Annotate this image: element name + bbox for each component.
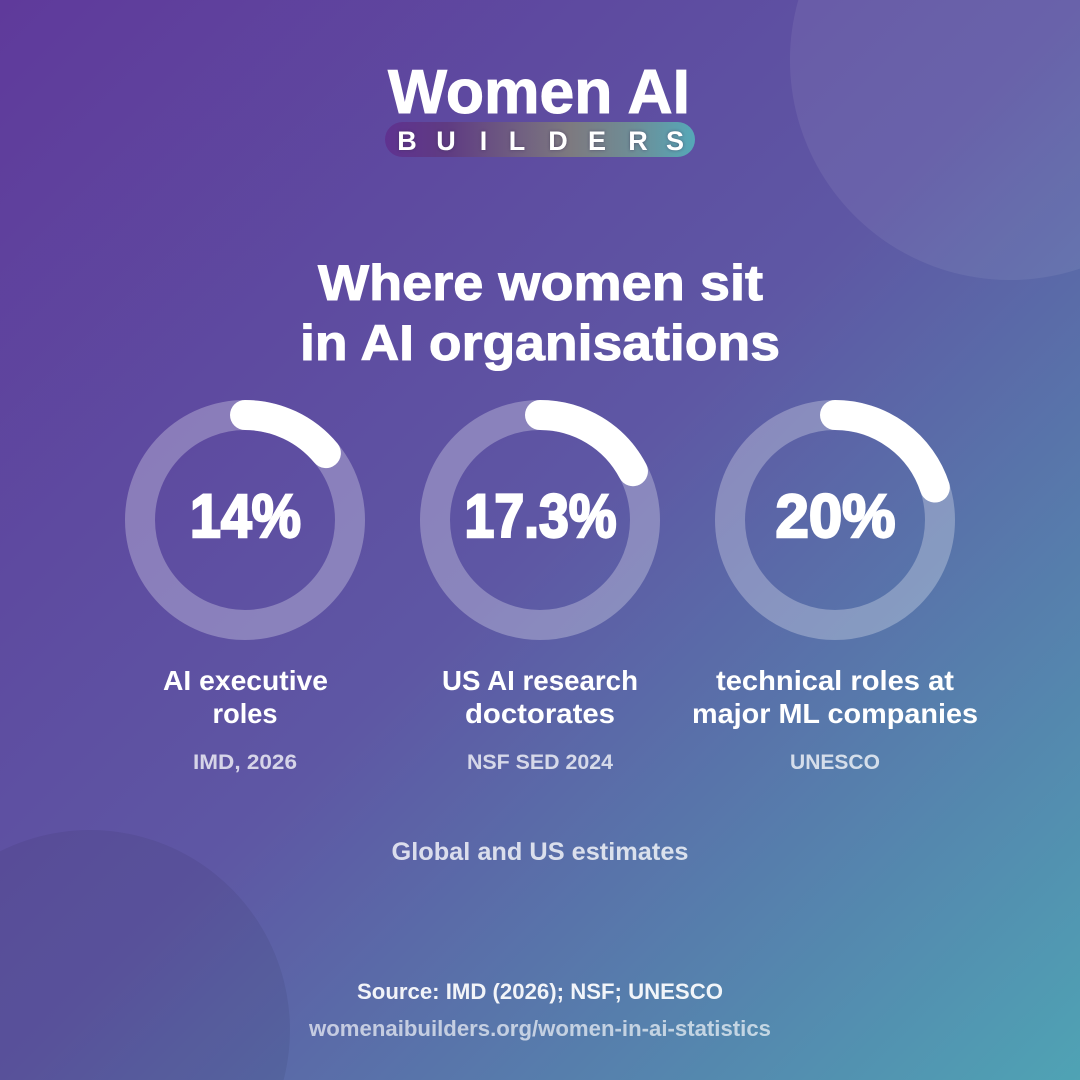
footer url: womenaibuilders.org/women-in-ai-statistics: [308, 1016, 771, 1041]
logo pill: [385, 122, 695, 157]
stat value: 20%: [776, 482, 896, 550]
title: Where women sit: [318, 255, 763, 311]
footer source: Source: IMD (2026); NSF; UNESCO: [357, 979, 723, 1004]
source: IMD, 2026: [193, 751, 297, 774]
decorative circle: top right: [790, 0, 1080, 280]
logo: [385, 58, 695, 157]
logo pill text shadow: BUILDERS: [397, 126, 684, 156]
donut chart: 17.3%: [435, 415, 645, 625]
panel: technical roles at major ML companies: major ML companies: [692, 698, 978, 729]
stat label: US AI research: [442, 665, 638, 696]
decorative circle: bottom left: [0, 830, 290, 1080]
stat label: AI executive: [163, 665, 328, 696]
note: Global and US estimates: [392, 838, 688, 866]
panel: technical roles at major ML companies: [692, 415, 978, 774]
donut chart: 20%: [730, 415, 940, 625]
donut chart: 14%: [140, 415, 350, 625]
source: NSF SED 2024: [467, 751, 613, 774]
panel: AI executive roles: roles: [212, 698, 278, 729]
panel: US AI research doctorates: doctorates: [465, 698, 615, 729]
stat label: technical roles at: [716, 665, 954, 696]
source: UNESCO: [790, 751, 880, 774]
logo wordmark: Women AI: [388, 58, 690, 127]
logo pill text: BUILDERS: [397, 126, 684, 156]
title: [300, 255, 780, 371]
stat value: 17.3%: [464, 482, 616, 550]
title: in AI organisations: [300, 315, 780, 371]
stat value: 14%: [190, 482, 301, 550]
panel: US AI research doctorates: [435, 415, 645, 774]
panel: AI executive roles: [140, 415, 350, 774]
